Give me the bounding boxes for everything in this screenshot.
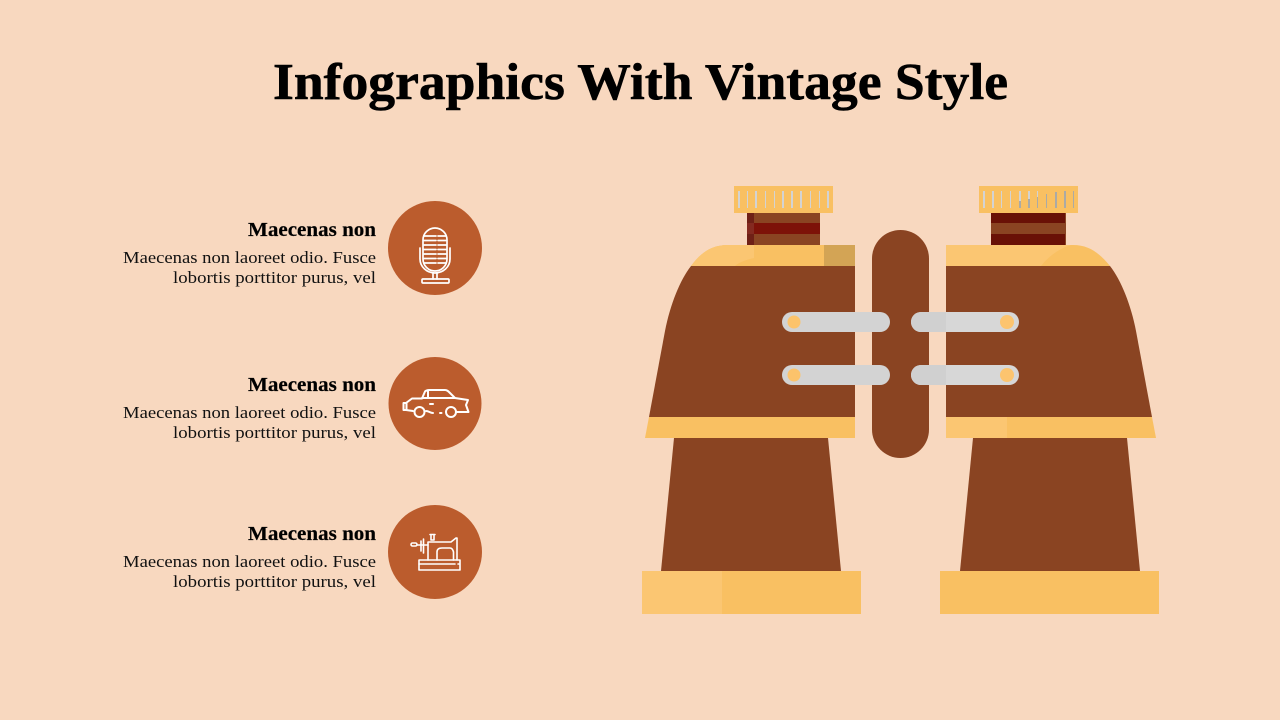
left lower barrel: [661, 438, 841, 571]
description 2: [123, 403, 376, 442]
title: Infographics With Vintage Style: [273, 54, 1008, 111]
center hinge: [872, 230, 929, 458]
left shoulder band: [691, 245, 855, 266]
icon: microphone: [420, 228, 450, 283]
left lower band: [645, 417, 855, 438]
binoculars illustration: [642, 186, 1159, 614]
icon circle 2: [388, 357, 482, 450]
lower left strap: [782, 365, 890, 385]
right eyepiece cap: [979, 186, 1078, 213]
left eyepiece cap: [734, 186, 833, 213]
description 1: Maecenas non laoreet odio. Fusce: [123, 248, 376, 267]
item 2: car: [123, 357, 482, 450]
left body: [649, 266, 855, 417]
right base: [940, 571, 1159, 614]
description 2: lobortis porttitor purus, vel: [173, 423, 376, 442]
description 3: Maecenas non laoreet odio. Fusce: [123, 552, 376, 571]
lower right strap: [911, 365, 1019, 385]
heading 1: Maecenas non: [248, 219, 376, 241]
description 2: Maecenas non laoreet odio. Fusce: [123, 403, 376, 422]
item 1: microphone: [123, 201, 482, 295]
icon: sewing machine: [411, 534, 460, 570]
icon: car: [404, 390, 468, 417]
left base: [642, 571, 861, 614]
right neck: [991, 213, 1066, 245]
left barrel: [642, 186, 861, 614]
right body: [946, 266, 1152, 417]
right shoulder band: [946, 245, 1110, 266]
description 1: [123, 248, 376, 287]
heading 3: Maecenas non: [248, 523, 376, 545]
heading 2: Maecenas non: [248, 374, 376, 396]
right lower barrel: [960, 438, 1140, 571]
description 3: [123, 552, 376, 591]
icon circle 1: [388, 201, 482, 295]
icon circle 3: [388, 505, 482, 599]
right lower band: [946, 417, 1156, 438]
left neck: [747, 213, 820, 245]
description 3: lobortis porttitor purus, vel: [173, 572, 376, 591]
upper right strap: [911, 312, 1019, 332]
description 1: lobortis porttitor purus, vel: [173, 268, 376, 287]
item 3: sewing machine: [123, 505, 482, 599]
right barrel: [940, 186, 1159, 614]
upper left strap: [782, 312, 890, 332]
